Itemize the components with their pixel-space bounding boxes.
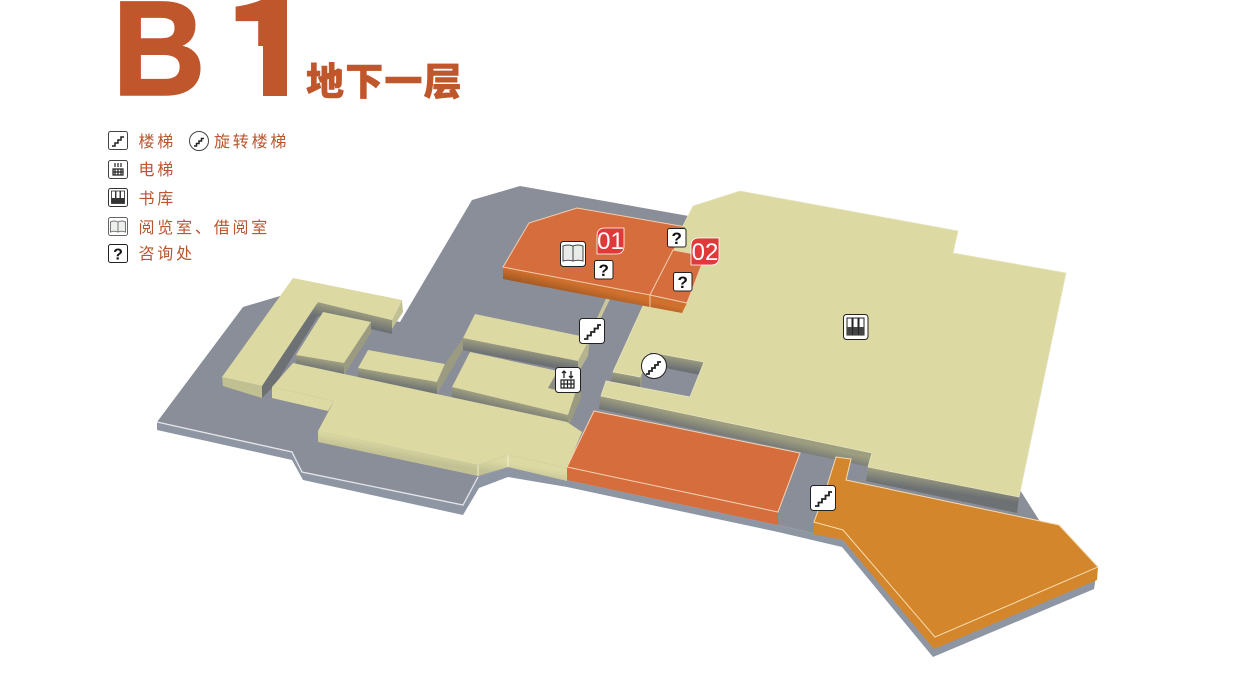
legend: stacks xyxy=(108,188,176,208)
legend xyxy=(108,132,289,264)
icon: stacks xyxy=(844,314,868,340)
icon: information 2 xyxy=(668,228,686,248)
legend: spiral stairs xyxy=(190,132,289,151)
block: small room xyxy=(358,350,445,394)
block: connecting wall xyxy=(437,338,463,394)
icon: reading room xyxy=(560,242,586,266)
legend: elevator: 电梯 xyxy=(138,161,176,179)
legend: stacks: 书库 xyxy=(138,190,176,208)
legend: reading room: 阅览室、借阅室 xyxy=(138,219,270,237)
heading: floor name: 地下一层 xyxy=(306,62,463,104)
thin corridor wall xyxy=(586,290,614,342)
block: long south room xyxy=(272,363,582,481)
big stacks hall xyxy=(599,191,1066,513)
legend: stairs xyxy=(108,132,176,151)
legend: information desk xyxy=(108,244,195,264)
icon: information 3 xyxy=(674,272,692,292)
icon: spiral stairs xyxy=(642,354,666,378)
legend: information desk: 咨询处 xyxy=(138,245,195,263)
room 02 xyxy=(650,250,705,303)
block: inner room xyxy=(296,312,371,375)
room 01 xyxy=(503,208,686,295)
legend: stairs: 楼梯 xyxy=(138,133,176,151)
room: amber hall xyxy=(814,457,1098,649)
icon: information 1 xyxy=(594,260,613,280)
badge 01: 01 xyxy=(597,228,624,255)
legend: elevator xyxy=(108,160,176,179)
icon: information 2: ? xyxy=(672,229,682,248)
room 01 and 02 walls xyxy=(503,267,687,313)
base slab side xyxy=(157,422,1097,657)
icon: elevator xyxy=(556,368,580,392)
legend: information desk: ? xyxy=(113,246,123,264)
block: upper long room xyxy=(463,314,590,373)
legend: spiral stairs: 旋转楼梯 xyxy=(214,133,289,151)
block: L-shaped room xyxy=(222,278,403,398)
icon: information 3: ? xyxy=(678,273,688,292)
icon: stairs north xyxy=(580,318,604,344)
small shadow at elevator xyxy=(548,374,556,390)
icon: stairs south xyxy=(810,486,836,510)
base slab top xyxy=(157,186,1060,540)
floor plan xyxy=(157,186,1098,657)
badge 02: 02 xyxy=(692,239,718,266)
room: orange south hall xyxy=(567,411,800,525)
block: lower long room xyxy=(452,352,581,428)
icon: information 1: ? xyxy=(599,261,609,280)
title: B1 xyxy=(120,0,287,96)
